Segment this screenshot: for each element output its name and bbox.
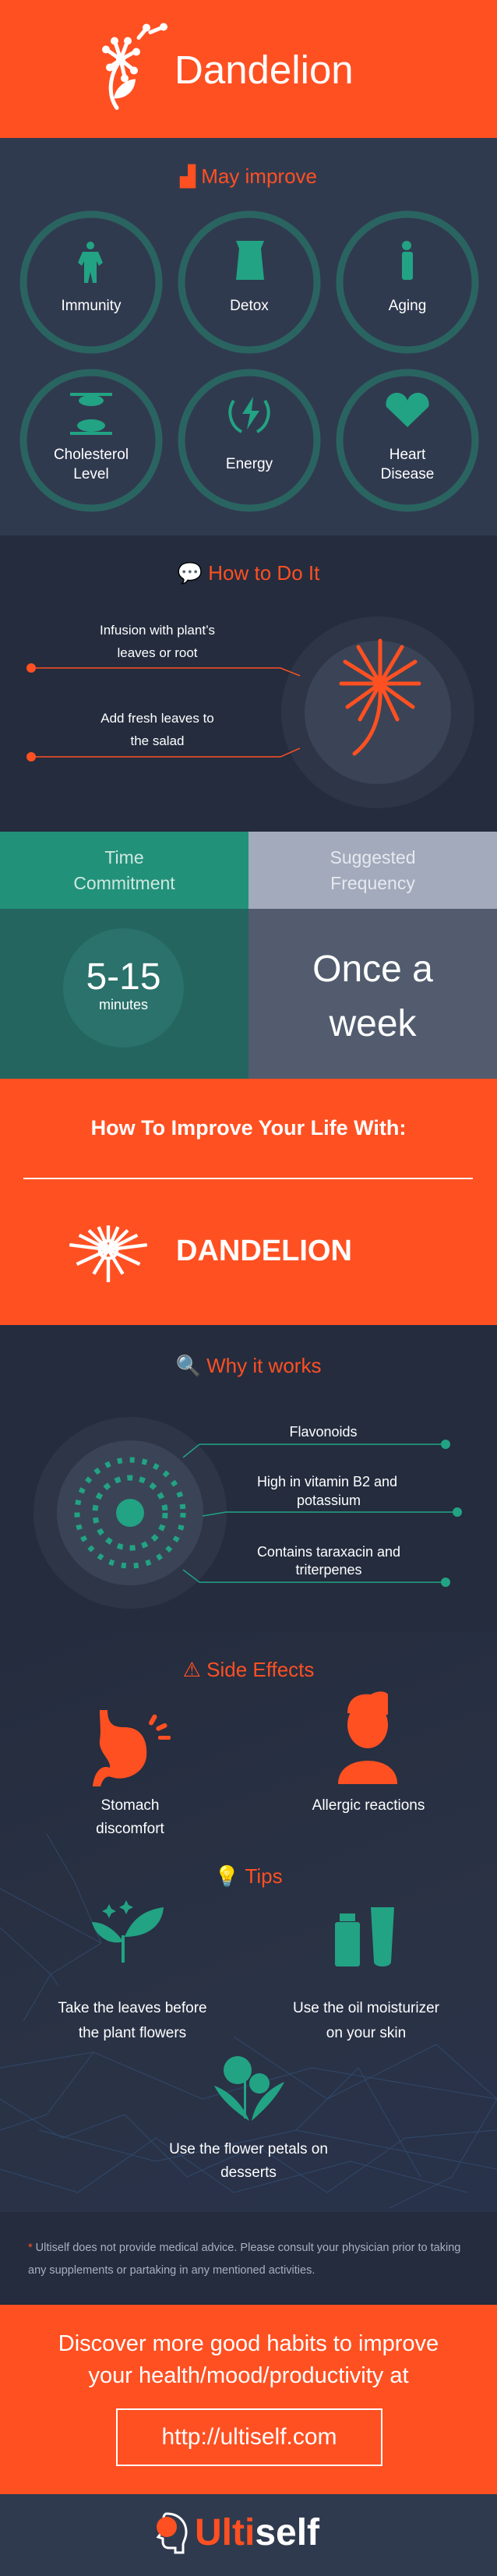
circles grid: Immunity (61, 298, 122, 314)
flower icon (214, 2056, 284, 2121)
header: time commitment: Commitment (73, 873, 175, 893)
header (0, 0, 497, 138)
value: once a week: week (329, 1003, 417, 1044)
cta text: your health/mood/productivity at (88, 2363, 409, 2388)
panel: may improve (0, 138, 497, 535)
circles grid (20, 210, 478, 511)
panel: why it works: Contains taraxacin and (257, 1544, 400, 1560)
panel: how to do it: leaves or root (117, 645, 198, 660)
panel: side effects and tips: Allergic reactions (312, 1797, 425, 1814)
circles grid: Level (73, 466, 109, 482)
allergy icon (338, 1691, 397, 1784)
panel: how to do it: the salad (131, 733, 184, 748)
circles grid: Heart (389, 447, 426, 463)
value: once a week (312, 949, 433, 1044)
circles grid: Detox (230, 298, 269, 314)
footer (0, 2494, 497, 2576)
panel: time commitment (0, 832, 248, 1079)
circles grid: Cholesterol (54, 447, 129, 463)
panel: side effects and tips (0, 1631, 497, 2212)
call to action (0, 2305, 497, 2494)
header: frequency: Suggested (330, 847, 415, 868)
value: once a week: Once a (312, 949, 433, 990)
logo: Ultiself (195, 2512, 319, 2553)
heading: tips: 💡 Tips (214, 1864, 283, 1888)
heading: how to do it: 💬 How to Do It (178, 561, 319, 585)
panel: why it works (0, 1325, 497, 1631)
heading: may improve: ▟ May improve (180, 164, 317, 188)
panel: improve your life banner (0, 1079, 497, 1325)
panel: suggested frequency (248, 832, 497, 1079)
panel: why it works: Flavonoids (289, 1424, 358, 1440)
panel: why it works: High in vitamin B2 and (257, 1474, 397, 1489)
panel: how to do it: Add fresh leaves to (100, 711, 214, 726)
value: 5-15 minutes: 5-15 (86, 956, 161, 998)
url box: http://ultiself.com (161, 2424, 337, 2450)
header: time commitment: Time (104, 847, 144, 868)
panel: side effects and tips: the plant flowers (79, 2025, 186, 2041)
heading: side effects: ⚠ Side Effects (183, 1658, 314, 1681)
title: Dandelion (174, 48, 354, 92)
panel: side effects and tips: desserts (220, 2164, 277, 2181)
header: time commitment (0, 832, 248, 909)
panel: side effects and tips: on your skin (326, 2025, 406, 2041)
panel: how to do it: Infusion with plant’s (100, 623, 215, 638)
circles grid: Aging (389, 298, 426, 314)
cta text: Discover more good habits to improve (58, 2331, 439, 2356)
cta text (58, 2331, 439, 2388)
circles grid: Disease (381, 466, 434, 482)
disclaimer: * Ultiself does not provide medical advice. Please consult your physician prior to taking any supplements or partaking in any mentioned activities. (28, 2242, 460, 2277)
bottles icon (335, 1907, 394, 1966)
value: 5-15 minutes (63, 928, 184, 1048)
heading: why it works: 🔍 Why it works (176, 1354, 321, 1377)
panel: why it works: triterpenes (295, 1562, 362, 1578)
panel: why it works: potassium (297, 1493, 361, 1508)
value: 5-15 minutes: minutes (99, 997, 148, 1012)
icon: dandelion head (69, 1225, 147, 1283)
icon: dandelion (102, 23, 167, 110)
banner heading: How To Improve Your Life With: (91, 1116, 406, 1140)
panel: how to do it (0, 535, 497, 832)
url box (116, 2408, 382, 2466)
panel: side effects and tips: Use the oil moisturizer (293, 2000, 440, 2016)
header: frequency: Frequency (330, 873, 415, 893)
stomach icon (93, 1710, 171, 1786)
panel: side effects and tips: discomfort (96, 1821, 165, 1837)
panel: side effects and tips: Use the flower petals on (169, 2141, 328, 2157)
circles grid: Energy (226, 456, 273, 472)
panel: side effects and tips: Stomach (101, 1797, 159, 1814)
header: frequency (248, 832, 497, 909)
label: dandelion: DANDELION (176, 1235, 352, 1267)
panel: side effects and tips: Take the leaves before (58, 2000, 207, 2016)
leaves icon (92, 1900, 164, 1963)
